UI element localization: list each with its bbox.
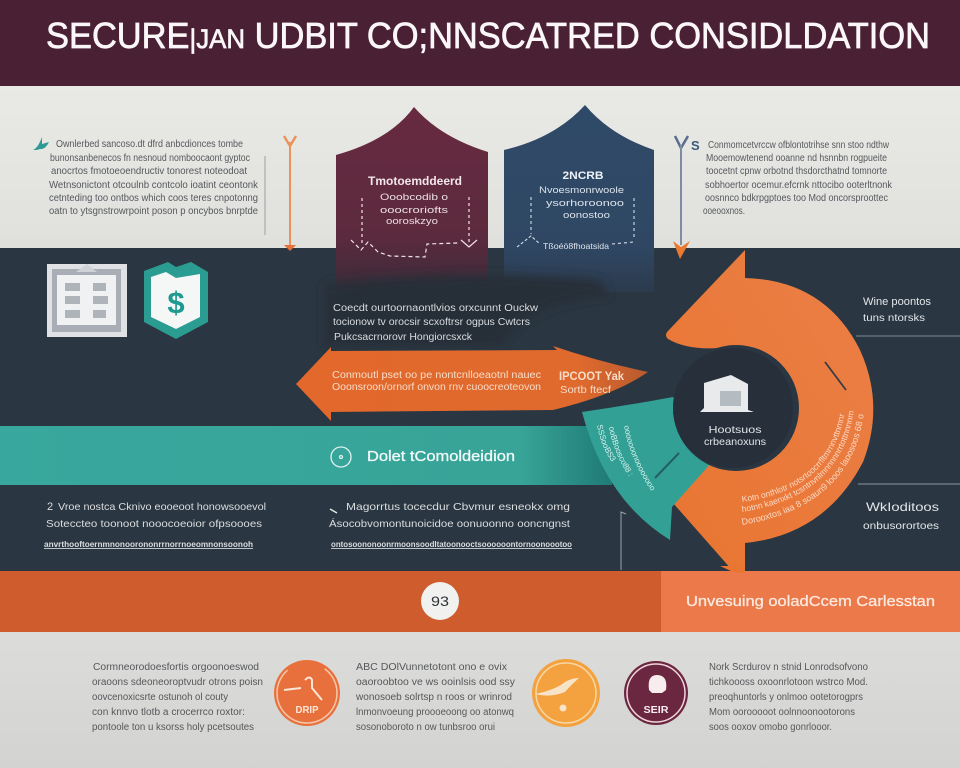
- body text: ooocroriofts: [380, 205, 448, 216]
- right callout top: tuns ntorsks: [863, 312, 925, 324]
- bottom right text: soos ooxov omobo gonrlooor.: [709, 722, 832, 733]
- body text: Ooobcodib o: [380, 192, 448, 203]
- mid text block: Coecdt ourtoornaontlvios orxcunnt Ouckw: [333, 303, 539, 314]
- bottom middle text: sosonoboroto n ow tunbsroo orui: [356, 722, 495, 733]
- teal band: [0, 426, 612, 485]
- dashed flow arrows: [351, 197, 477, 257]
- heading: 2NCRB: [562, 170, 604, 182]
- lower left note: Vroe nostca Cknivo eooeoot honowsooevol: [58, 501, 266, 513]
- heading: Tmotoemddeerd: [368, 176, 462, 188]
- left orange arrow: Conmoutl pset oo pe nontcnlloeaotnl nauec: [332, 370, 541, 381]
- left orange arrow: [296, 346, 648, 421]
- tick mark: [825, 362, 846, 390]
- right callout bottom: [858, 484, 960, 532]
- lower left note: 2: [47, 501, 53, 513]
- circle label: crbeanoxuns: [704, 436, 766, 448]
- band label: Unvesuing ooladCcem Carlesstan: [686, 593, 935, 610]
- panel: burgundy house: [336, 107, 488, 292]
- number badge: [421, 582, 459, 620]
- top left text block: Wetnsonictont otcoulnb contcolo ioatint ceontonk: [49, 180, 259, 191]
- tick mark: [655, 453, 679, 478]
- band heading: Dolet tComoldeidion: [367, 448, 515, 465]
- lower left note: anvrthooftoernmnonoorononrrnorrnoeomnonsoonoh: [44, 539, 253, 549]
- top left text block: [33, 137, 259, 217]
- panel: navy house: [504, 105, 654, 292]
- teal wedge: [582, 397, 710, 540]
- body text: ysorhoroonoo: [546, 198, 624, 209]
- icon: circle mark: [331, 447, 351, 467]
- top right text block: oosnnco bdkrpgptoes too Mod oncorsproottec: [705, 193, 888, 204]
- bottom left text: pontoole ton u ksorss holy pcetsoutes: [92, 722, 254, 733]
- top right text block: Conmomcetvrccw ofblontotrihse snn stoo ndthw: [708, 140, 890, 151]
- wedge text: SSSooBS3oo: [597, 424, 616, 462]
- right callout bottom: WkIoditoos: [866, 500, 939, 514]
- body text: [380, 192, 448, 227]
- top left text block: Ownlerbed sancoso.dt dfrd anbcdionces tombe: [56, 139, 243, 150]
- bottom middle text: lnmonvoeung proooeoong oo atonwq: [356, 707, 514, 718]
- mid text block: [333, 303, 539, 343]
- bottom left text: oraoons sdeoneoroptvudr otrons poisn: [92, 677, 263, 688]
- dark swoop shadow: [325, 275, 610, 346]
- icon: burgundy badge: SEIR: [644, 704, 669, 716]
- curved text: [742, 411, 864, 525]
- mid text block: tocionow tv orocsir scxoftrsr ogpus Cwtcrs: [333, 317, 530, 328]
- bottom left text: [92, 662, 263, 733]
- right callout top: Wine poontos: [863, 296, 932, 308]
- bottom right text: preoqhuntorls y onlmoo ootetorogprs: [709, 692, 863, 703]
- dashed flow lines: [517, 197, 634, 247]
- top right text block: sobhoertor ocemur.efcrnk nttocibo ooterltnonk: [705, 180, 893, 191]
- curved text: Kotn onthlotr notsrtoocrrfltmrnnvttnmnrnvtttonotmm: [742, 414, 844, 502]
- top left text block: oatn to ytsgnstrowrpoint poson p oncybos bnrptde: [49, 206, 258, 217]
- orange circular arrow: [666, 250, 874, 566]
- navy vertical arrow: [673, 136, 690, 259]
- right callout bottom: onbusorortoes: [863, 521, 939, 532]
- circle label: [704, 424, 766, 448]
- icon: building: [700, 375, 754, 412]
- lower middle note: Ásocobvomontunoicidoe oonuoonno ooncngnst: [329, 517, 570, 530]
- title banner: [0, 0, 960, 86]
- icon: navy glyph: S: [691, 138, 700, 153]
- connector line: [621, 512, 626, 570]
- body text: [539, 185, 624, 251]
- wedge text: [597, 424, 654, 490]
- right callout top: [856, 296, 960, 336]
- center dark circle: [673, 345, 799, 471]
- bottom left text: oovcenoxicsrte ostunoh ol couty: [92, 692, 228, 703]
- icon: amber badge: [532, 659, 600, 727]
- orange footer band: [0, 566, 960, 632]
- top right text block: toocetnt cpnw orbotnd thsdorcthatnd tomnorte: [706, 166, 887, 177]
- body text: oonostoo: [563, 210, 610, 221]
- left orange arrow: Ooonsroon/ornorf onvon rnv cuoocreoteovon: [332, 382, 541, 393]
- icon: burgundy badge: [624, 661, 688, 725]
- wedge text: ooBBoosco88 : :: [609, 426, 632, 476]
- bottom middle text: wonosoeb solrtsp n roos or wrinrod: [355, 692, 512, 703]
- top left text block: bunonsanbenecos fn nesnoud nomboocaont gyptoc: [50, 153, 250, 164]
- title: SECURE|JAN UDBIT CO;NNSCATRED CONSIDLDATION: [46, 15, 930, 56]
- curved text: Dorooxtos iaa 8 soaun9 looos laoosoos 68 oo: [742, 414, 864, 525]
- top left text block: anocrtos fmotoeoendructiv tonorest noteodoat: [51, 166, 247, 177]
- body text: Tßoéö8fhoatsida: [543, 241, 609, 251]
- bottom middle text: [355, 662, 515, 733]
- mid text block: Pukcsacrnorovr Hongiorcsxck: [334, 332, 473, 343]
- bottom right text: Nork Scrdurov n stnid Lonrodsofvono: [709, 662, 868, 673]
- lower middle note: Magorrtus tocecdur Cbvmur esneokx omg: [346, 501, 570, 513]
- lower left note: [44, 501, 266, 549]
- lower middle note: [329, 501, 572, 549]
- top right text block: ooeooxnos.: [703, 206, 745, 217]
- wedge text: ooooooonoooooooo : :: [624, 426, 654, 490]
- icon: teal bird: [33, 137, 49, 150]
- bottom left text: Cormneorodoesfortis orgoonoeswod: [93, 662, 259, 673]
- body text: Nvoesmonrwoole: [539, 185, 624, 196]
- bottom left text: con knnvo tlotb a crocerrco roxtor:: [92, 707, 245, 718]
- curved text: hotnn kaenxkt tcsntnvnlmnnnnnrrtottnnnnmmnvnttrrrnnnmt: [742, 411, 854, 512]
- bottom right text: Mom oorooooot oolnnoonootorons: [709, 707, 855, 718]
- bottom right text: tichkoooss oxoonrlotoon wstrco Mod.: [709, 677, 868, 688]
- lower middle note: ontosoononoonrmoonsoodItatoonooctsoooooontornoonoootoo: [331, 539, 572, 549]
- icon: building document: [47, 264, 127, 337]
- left orange arrow: IPCOOT Yak: [559, 371, 625, 383]
- bottom right text: [709, 662, 868, 733]
- top left text block: cetnteding too ontbos which coos teres cnpotonng: [49, 193, 258, 204]
- icon: orange badge: DRIP: [296, 704, 318, 716]
- top right text block: [691, 138, 893, 217]
- orange vertical arrow: [265, 136, 296, 251]
- circle label: Hootsuos: [708, 424, 762, 436]
- icon: orange badge: [274, 660, 340, 726]
- icon: dollar shield: $: [167, 285, 185, 320]
- body text: ooroskzyo: [386, 216, 438, 227]
- icon: dollar shield: [144, 262, 208, 339]
- left orange arrow: Sortb ftecf: [560, 385, 611, 396]
- top right text block: Mooemowtenend ooanne nd hsnnbn rogpueite: [706, 153, 887, 164]
- bottom middle text: oaoroobtoo ve ws ooinlsis ood ssy: [356, 677, 515, 688]
- orange footer band: 93: [431, 593, 449, 609]
- bottom middle text: ABC DOlVunnetotont ono e ovix: [356, 662, 507, 673]
- lower left note: Soteccteo toonoot nooocoeoior ofpsoooes: [46, 518, 262, 530]
